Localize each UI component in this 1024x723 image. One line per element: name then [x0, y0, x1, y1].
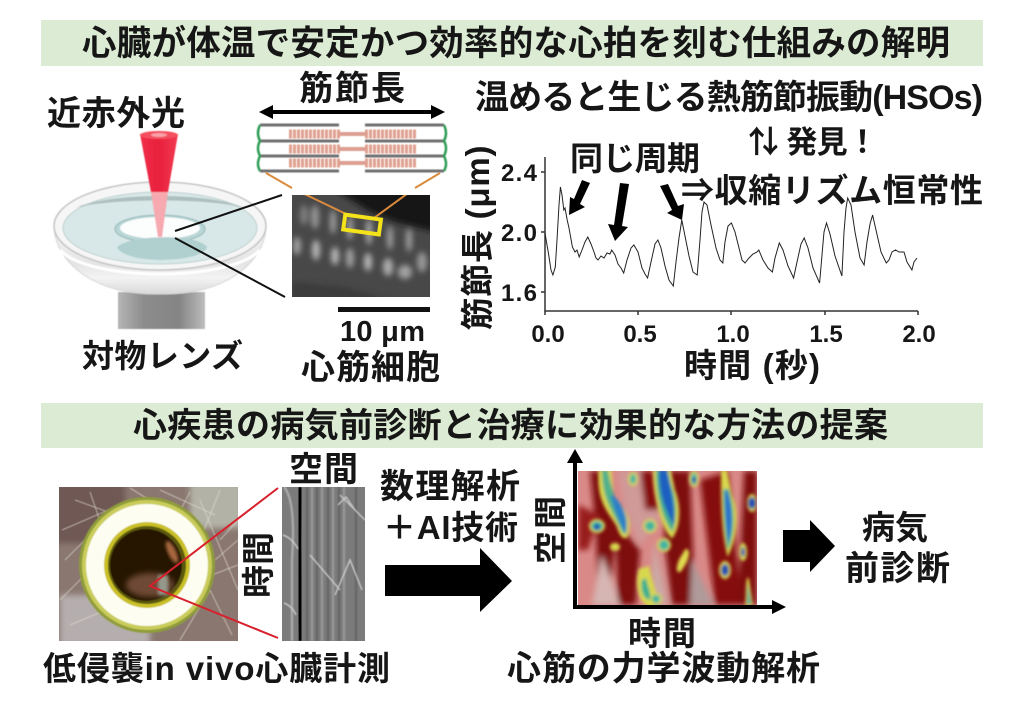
panel: sarcomere length diagram	[258, 70, 446, 387]
panel: in vivo heart measurement	[43, 451, 390, 687]
chart: x tick labels: 0.5	[623, 321, 657, 348]
heading banner: bottom: 心疾患の病気前診断と治療に効果的な方法の提案	[133, 407, 888, 445]
panel: near-infrared microscope setup	[47, 95, 285, 374]
chart: x tick labels: 1.5	[809, 321, 843, 348]
label: pre-disease diagnosis: 前診断	[845, 550, 950, 588]
leader lines: red	[150, 488, 278, 638]
label: scale 10 um: 10 μm	[340, 316, 425, 348]
arrow: to analysis	[385, 548, 512, 612]
label: minimally invasive in vivo heart measurement: 低侵襲in vivo心臓計測	[43, 650, 390, 687]
arrow: period marker 2	[608, 183, 629, 241]
label: mathematical analysis and AI	[380, 468, 520, 546]
chart: x tick labels	[531, 321, 936, 348]
label: same period: 同じ周期	[570, 140, 700, 177]
heading banner: top: 心臓が体温で安定かつ効率的な心拍を刻む仕組みの解明	[82, 24, 950, 63]
orange zoom lines	[304, 195, 407, 217]
chart: x tick labels: 1.0	[716, 321, 750, 348]
arrow: to prediagnosis	[783, 520, 835, 572]
chart: y tick labels: 2.4	[501, 160, 538, 187]
photo: heart through ring window	[55, 483, 242, 645]
leader lines: dish to micrograph	[175, 195, 285, 297]
chart: axes	[541, 157, 918, 315]
arrow: period marker 1	[569, 180, 590, 215]
label: objective lens: 対物レンズ	[82, 338, 243, 374]
label: cardiomyocyte: 心筋細胞	[301, 349, 440, 387]
chart: y tick labels	[501, 160, 538, 307]
kymograph: spatiotemporal image	[282, 487, 365, 641]
label: sarcomere length: 筋節長	[299, 70, 405, 108]
heatmap axes	[567, 449, 786, 614]
label: discovery: ⇅ 発見！	[748, 125, 878, 160]
icon: near-infrared light cone	[140, 131, 178, 237]
label: time: 時間	[240, 532, 277, 598]
heading: HSOs: 温めると生じる熱筋節振動(HSOs)	[475, 79, 983, 117]
icon: objective lens	[118, 292, 205, 329]
axis label: space: 空間	[532, 496, 569, 564]
orange zoom lines above micrograph	[266, 173, 440, 188]
label: space: 空間	[289, 451, 358, 489]
axis label: sarcomere length: 筋節長 (μm)	[459, 146, 496, 330]
label: pre-disease diagnosis	[845, 509, 950, 588]
micrograph: cardiomyocyte	[292, 195, 430, 297]
panel: mechanical wave analysis heatmap	[507, 449, 820, 688]
heading banner: bottom	[41, 403, 983, 448]
label: near-infrared light: 近赤外光	[47, 95, 185, 133]
arrow: sarcomere length double-headed	[259, 105, 445, 119]
axis label: time: 時間 (秒)	[684, 347, 820, 384]
chart: oscillation trace	[545, 187, 917, 286]
label: mathematical analysis and AI: 数理解析	[380, 468, 520, 506]
wave blobs	[600, 471, 752, 605]
chart: x tick labels: 0.0	[531, 321, 565, 348]
label: contraction rhythm homeostasis: ⇒収縮リズム恒常性	[681, 172, 983, 209]
label: mathematical analysis and AI: ＋AI技術	[383, 509, 518, 546]
chart: y tick labels: 1.6	[501, 280, 537, 307]
panel: heat sarcomere oscillation chart	[459, 79, 983, 384]
label: myocardial mechanical wave analysis: 心筋の力学波動解析	[507, 650, 820, 688]
icon: culture dish	[54, 182, 266, 294]
heatmap	[578, 471, 757, 605]
chart: x tick labels: 2.0	[902, 321, 936, 348]
axis label: time: 時間	[628, 615, 696, 652]
label: pre-disease diagnosis: 病気	[862, 509, 928, 546]
highlight: yellow selection box	[343, 215, 381, 234]
scale bar	[338, 307, 430, 312]
diagram: sarcomere filaments	[258, 125, 446, 171]
chart: y tick labels: 2.0	[501, 220, 537, 247]
arrow: period marker 3	[660, 184, 684, 220]
